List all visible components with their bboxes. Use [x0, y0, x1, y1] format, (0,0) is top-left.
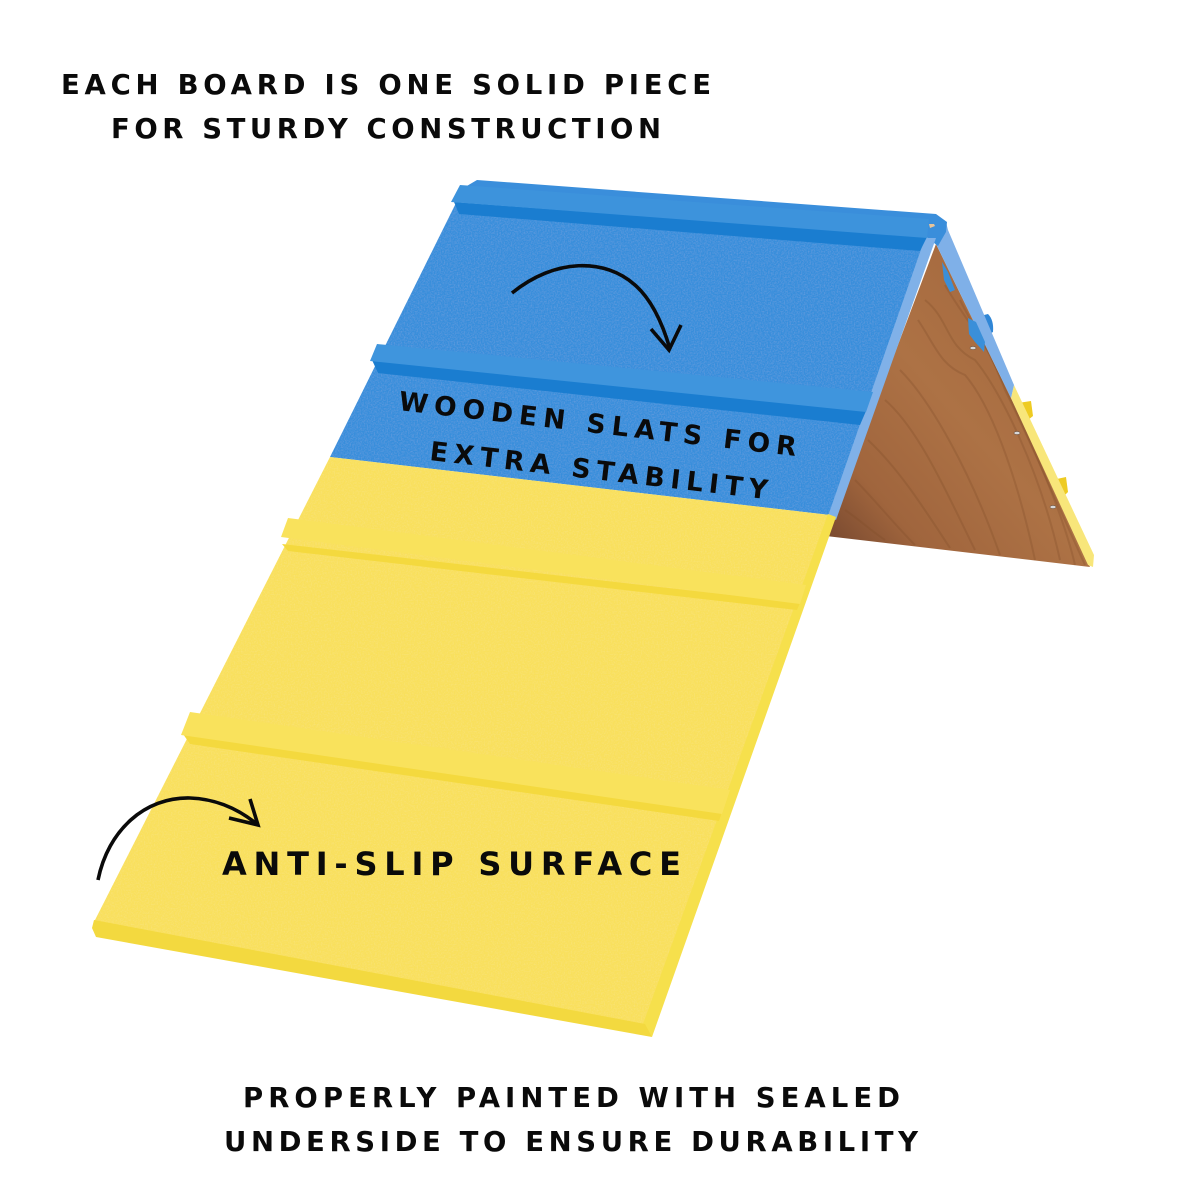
heading: solid piece: EACH BOARD IS ONE SOLID PIECE — [61, 69, 711, 101]
board side edge — [643, 238, 936, 1037]
blue painted surface — [330, 205, 928, 515]
far board edge — [936, 222, 1094, 567]
front board edge — [92, 920, 652, 1037]
back top rail — [460, 180, 947, 246]
slat 4 yellow — [181, 712, 730, 821]
callout: wooden slats — [397, 386, 798, 506]
nails — [970, 346, 1056, 509]
footer: durability: UNDERSIDE TO ENSURE DURABILITY — [224, 1126, 919, 1158]
slat 2 blue — [370, 344, 873, 425]
arrow: wooden slats — [512, 266, 681, 350]
heading: solid piece: FOR STURDY CONSTRUCTION — [111, 113, 661, 145]
ramp illustration — [92, 180, 1094, 1037]
yellow painted surface — [94, 457, 830, 1026]
callout: anti-slip surface: ANTI-SLIP SURFACE — [222, 845, 681, 883]
footer: durability — [224, 1082, 919, 1158]
arrow: anti-slip — [98, 798, 258, 880]
slat 3 yellow — [281, 518, 806, 610]
wood underside — [826, 244, 1090, 567]
far side slat ends — [980, 314, 1068, 497]
callout: wooden slats: EXTRA STABILITY — [428, 436, 770, 506]
callout: wooden slats: WOODEN SLATS FOR — [397, 386, 798, 463]
heading: solid piece — [61, 69, 711, 145]
slat 1 blue — [451, 185, 929, 251]
footer: durability: PROPERLY PAINTED WITH SEALED — [243, 1082, 900, 1114]
